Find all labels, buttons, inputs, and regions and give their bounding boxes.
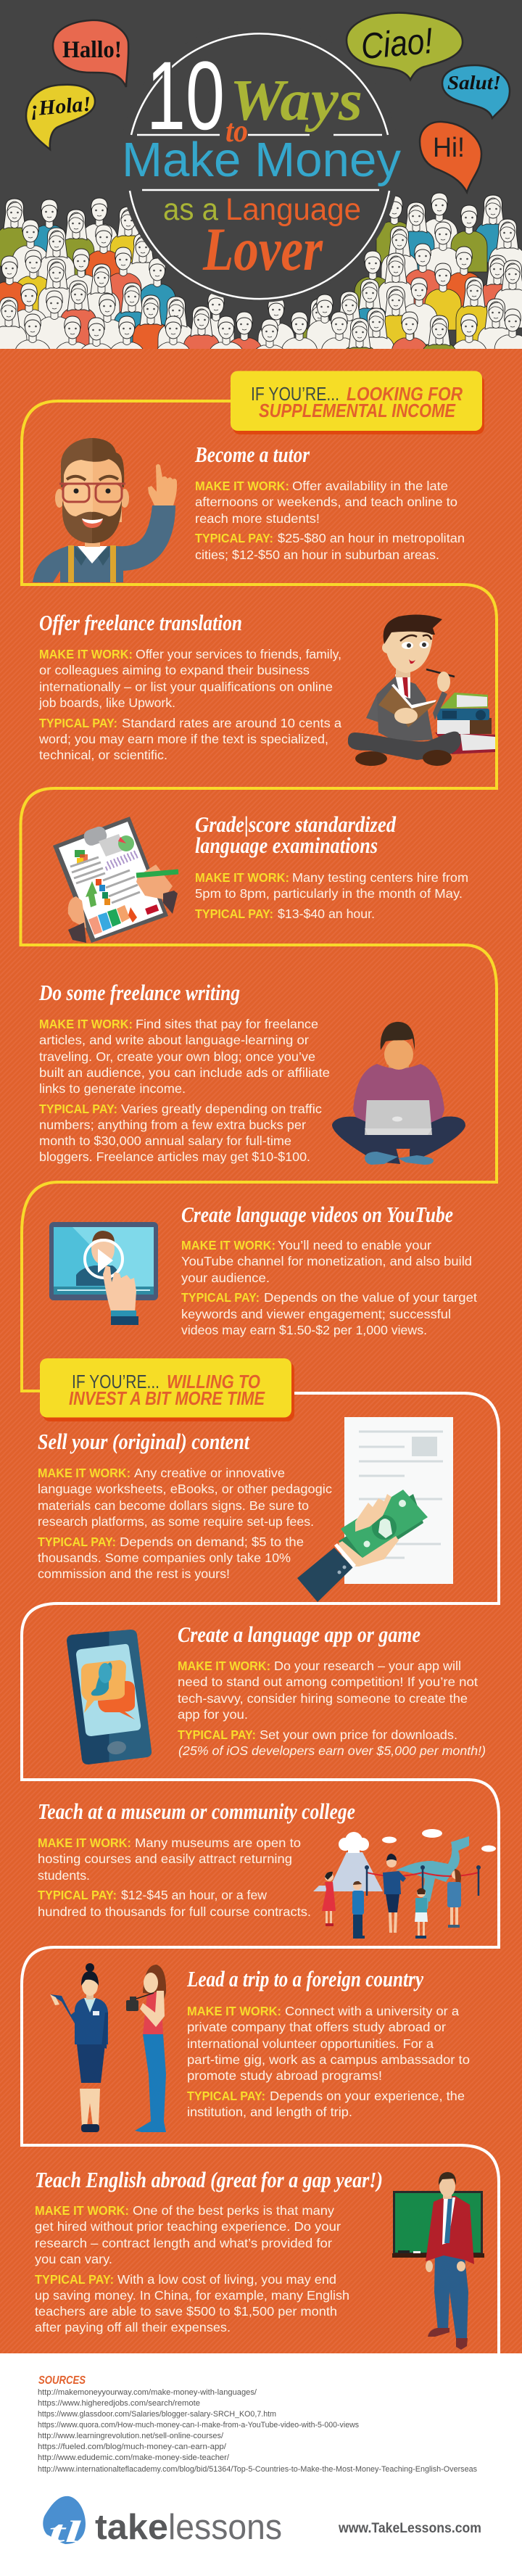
typical pay text: commission and the rest is yours!: [38, 1566, 230, 1581]
sources list: http://www.edudemic.com/make-money-side-teacher/: [38, 2453, 230, 2462]
sources list: [38, 2374, 477, 2474]
figure: tourist: [126, 1965, 166, 2132]
make it work text: part-time gig, work as a campus ambassador to: [187, 2052, 470, 2067]
speech bubble: Hallo: [53, 20, 128, 87]
make it work text: MAKE IT WORK:: [35, 2203, 129, 2218]
yellow connector line: [20, 401, 497, 1391]
typical pay text: numbers; anything from a few extra bucks per: [39, 1118, 306, 1132]
typical pay text: TYPICAL PAY:: [181, 1290, 260, 1305]
icon: person with laptop: [332, 1022, 465, 1165]
typical pay text: TYPICAL PAY:: [35, 2272, 114, 2287]
figure: girl: [415, 1888, 428, 1939]
make it work text: need to stand out among competition! If you’re not: [178, 1675, 478, 1689]
icon: museum scene: [313, 1829, 496, 1939]
callout: looking for supplemental income: SUPPLEMENTAL INCOME: [259, 400, 456, 421]
make it work text: your audience.: [181, 1271, 270, 1285]
speech bubble: Salut: [442, 65, 510, 118]
section: language app: [67, 1622, 486, 1764]
heading: Sell your (original) content: [38, 1429, 250, 1454]
make it work text: Connect with a university or a: [285, 2004, 459, 2018]
logo: takelessons: [43, 2496, 282, 2549]
sources list: https://fueled.com/blog/much-money-can-earn-app/: [38, 2443, 227, 2451]
speech bubble: Ciao: Ciao!: [360, 20, 434, 67]
speech bubble: Salut: Salut!: [447, 72, 501, 94]
make it work text: [38, 647, 341, 710]
typical pay text: institution, and length of trip.: [187, 2105, 352, 2119]
make it work text: built an audience, you can include ads or affiliate: [39, 1065, 330, 1080]
speech bubble: Ciao: [347, 13, 463, 80]
section: become a tutor: [33, 438, 465, 582]
typical pay text: $25-$80 an hour in metropolitan: [278, 531, 465, 545]
typical pay text: TYPICAL PAY:: [38, 1535, 116, 1549]
make it work text: hosting courses and easily attract returning: [38, 1852, 292, 1866]
title: as a Language: Language: [225, 192, 361, 227]
heading: Become a tutor: [194, 442, 310, 467]
make it work text: research – contract length and what’s provided for: [35, 2236, 332, 2250]
make it work text: afternoons or weekends, and teach online to: [195, 495, 457, 509]
typical pay text: TYPICAL PAY:: [178, 1727, 256, 1742]
heading: [195, 812, 396, 858]
speech bubble: Hola: ¡Hola!: [30, 92, 92, 121]
make it work text: MAKE IT WORK:: [39, 647, 133, 661]
callout: willing to invest more time: [40, 1358, 294, 1421]
heading: Grade|score standardized: [195, 812, 396, 837]
logo: takelessons: take: [95, 2508, 168, 2547]
typical pay text: hundred to thousands for full course contracts.: [38, 1904, 311, 1919]
typical pay text: bloggers. Freelance articles may get $10-$100.: [39, 1149, 310, 1164]
make it work text: MAKE IT WORK:: [38, 1466, 130, 1480]
figure: child in red: [322, 1872, 336, 1926]
callout: looking for supplemental income: IF YOU’RE...: [251, 383, 339, 405]
make it work text: [181, 1238, 472, 1285]
header panel: [0, 0, 522, 386]
callout: looking for supplemental income: LOOKING FOR: [347, 383, 463, 405]
speech bubble: Hola: [26, 85, 95, 149]
make it work text: Many testing centers hire from: [292, 870, 468, 885]
typical pay text: cities; $12-$50 an hour in suburban areas.: [195, 548, 439, 562]
make it work text: [178, 1659, 478, 1722]
heading: Create language videos on YouTube: [181, 1202, 453, 1227]
typical pay text: Depends on the value of your target: [264, 1290, 477, 1305]
logo: takelessons: lessons: [168, 2508, 282, 2547]
sources list: SOURCES: [38, 2374, 86, 2387]
make it work text: MAKE IT WORK:: [187, 2004, 281, 2018]
make it work text: One of the best perks is that many: [133, 2203, 334, 2218]
title: Make Money: Make Money: [122, 133, 401, 187]
make it work text: [38, 1836, 301, 1883]
make it work text: app for you.: [178, 1707, 248, 1722]
white connector line: [22, 1393, 499, 2353]
dark title circle: [120, 22, 399, 302]
typical pay text: TYPICAL PAY:: [39, 1102, 117, 1116]
typical pay text: thousands. Some companies only take 10%: [38, 1551, 291, 1565]
icon: phone with chat bubbles: [67, 1630, 152, 1764]
typical pay text: technical, or scientific.: [39, 748, 167, 762]
make it work text: MAKE IT WORK:: [195, 870, 289, 885]
make it work text: language worksheets, eBooks, or other pedagogic: [38, 1482, 332, 1496]
typical pay text: Standard rates are around 10 cents a: [122, 716, 341, 730]
heading: Teach at a museum or community college: [38, 1799, 355, 1824]
typical pay text: Depends on your experience, the: [270, 2089, 465, 2103]
make it work text: research platforms, as some require set-up fees.: [38, 1514, 314, 1529]
make it work text: YouTube channel for monetization, and also build: [181, 1254, 472, 1268]
typical pay text: [38, 1888, 311, 1919]
typical pay text: [39, 1102, 322, 1164]
typical pay text: [178, 1727, 486, 1758]
heading: Teach English abroad (great for a gap year!): [35, 2167, 383, 2192]
typical pay text: TYPICAL PAY:: [195, 907, 273, 921]
make it work text: Many museums are open to: [135, 1836, 301, 1850]
title: as a Language: as a: [163, 192, 218, 227]
section: teach english abroad: [35, 2167, 484, 2350]
sources list: https://www.higheredjobs.com/search/remote: [38, 2399, 200, 2408]
icon: document with money: [297, 1417, 453, 1602]
title: Ways: Ways: [230, 69, 362, 133]
section: museum or community college: [38, 1799, 496, 1939]
make it work text: [38, 1466, 332, 1529]
make it work text: promote study abroad programs!: [187, 2068, 382, 2083]
section: grade standardized exams: [53, 812, 468, 943]
typical pay text: [195, 907, 375, 921]
typical pay text: word; you may earn more if the text is specialized,: [38, 732, 328, 746]
sources list: https://www.glassdoor.com/Salaries/blogger-salary-SRCH_KO0,7.htm: [38, 2410, 276, 2419]
icon: tour guide and tourist: [50, 1963, 166, 2132]
make it work text: MAKE IT WORK:: [38, 1836, 131, 1850]
make it work text: [35, 2203, 341, 2266]
make it work text: students.: [38, 1868, 90, 1883]
make it work text: [187, 2004, 470, 2083]
make it work text: reach more students!: [195, 511, 320, 526]
circle outline: [130, 33, 389, 299]
sources list: https://www.quora.com/How-much-money-can-I-make-from-a-YouTube-video-with-5-000-views: [38, 2421, 359, 2430]
make it work text: Offer your services to friends, family,: [136, 647, 341, 661]
icon: video tablet with hand: [49, 1222, 158, 1325]
speech bubble: Hallo: Hallo!: [62, 37, 122, 63]
make it work text: internationally – or list your qualifications on online: [39, 680, 333, 694]
typical pay text: [38, 1535, 304, 1581]
icon: clipboard with test: [53, 817, 178, 943]
make it work text: MAKE IT WORK:: [195, 479, 289, 493]
callout: looking for supplemental income: [231, 371, 484, 434]
make it work text: materials can become dollars signs. Be sure to: [38, 1498, 309, 1513]
typical pay text: teachers are able to save $500 to $1,500 per month: [35, 2304, 337, 2319]
make it work text: MAKE IT WORK:: [178, 1659, 270, 1673]
speech bubble: Hi: [420, 122, 481, 192]
icon: bearded tutor: [33, 438, 177, 582]
make it work text: Find sites that pay for freelance: [136, 1017, 318, 1031]
typical pay text: [187, 2089, 465, 2119]
typical pay text: $13-$40 an hour.: [278, 907, 375, 921]
make it work text: or colleagues aiming to expand their business: [39, 663, 310, 677]
typical pay text: TYPICAL PAY:: [187, 2089, 265, 2103]
section: freelance translation: [38, 610, 495, 766]
figure: boy in blue: [352, 1881, 365, 1939]
callout: willing to invest more time: INVEST A BIT MORE TIME: [69, 1387, 265, 1409]
make it work text: Do your research – your app will: [274, 1659, 461, 1673]
typical pay text: after paying off all their expenses.: [35, 2320, 231, 2334]
make it work text: MAKE IT WORK:: [181, 1238, 276, 1252]
heading: language examinations: [195, 833, 378, 858]
icon: teacher at chalkboard: [392, 2172, 484, 2350]
typical pay text: videos may earn $1.50-$2 per 1,000 views.: [181, 1323, 427, 1337]
heading: Offer freelance translation: [39, 610, 242, 635]
title: Lover: Lover: [202, 215, 323, 284]
typical pay text: [195, 531, 465, 562]
make it work text: job boards, like Upwork.: [38, 695, 175, 710]
make it work text: international volunteer opportunities. For a: [187, 2036, 434, 2051]
make it work text: MAKE IT WORK:: [39, 1017, 133, 1031]
sources list: http://www.learningrevolution.net/sell-online-courses/: [38, 2432, 224, 2440]
make it work text: Any creative or innovative: [134, 1466, 285, 1480]
typical pay text: keywords and viewer engagement; successful: [181, 1307, 451, 1321]
callout: willing to invest more time: IF YOU’RE...: [72, 1371, 160, 1392]
typical pay text: up saving money. In China, for example, many English: [35, 2288, 349, 2303]
make it work text: articles, and write about language-learning or: [39, 1033, 309, 1047]
make it work text: traveling. Or, create your own blog; once you’ve: [39, 1049, 315, 1064]
website url: www.TakeLessons.com: [338, 2521, 481, 2536]
typical pay text: (25% of iOS developers earn over $5,000 per month!): [178, 1743, 486, 1758]
make it work text: [195, 479, 457, 526]
icon: translator with books: [348, 614, 495, 766]
section: freelance writing: [38, 980, 465, 1165]
make it work text: [195, 870, 468, 901]
figure: museum guide: [383, 1854, 406, 1933]
typical pay text: With a low cost of living, you may end: [117, 2272, 336, 2287]
speech bubble: Hi: Hi!: [433, 133, 465, 163]
make it work text: links to generate income.: [39, 1081, 186, 1096]
section: youtube videos: [49, 1202, 477, 1337]
typical pay text: Depends on demand; $5 to the: [120, 1535, 304, 1549]
make it work text: get hired without prior teaching experience. Do your: [35, 2219, 341, 2234]
make it work text: 5pm to 8pm, particularly in the month of May.: [195, 886, 463, 901]
typical pay text: [181, 1290, 477, 1337]
make it work text: private company that offers study abroad or: [187, 2020, 446, 2034]
title: 10: 10: [146, 42, 225, 150]
typical pay text: TYPICAL PAY:: [38, 1888, 117, 1902]
orange background panel: [0, 349, 522, 903]
sources list: http://www.internationalteflacademy.com/blog/bid/51364/Top-5-Countries-to-Make-the-Most-Money-Teaching-English-Overseas: [38, 2465, 477, 2474]
typical pay text: [38, 716, 341, 762]
make it work text: you can vary.: [35, 2252, 112, 2266]
sources list: http://makemoneyyourway.com/make-money-with-languages/: [38, 2388, 257, 2397]
callout: willing to invest more time: WILLING TO: [167, 1371, 260, 1392]
title: to: to: [225, 113, 248, 149]
figure: woman: [447, 1869, 461, 1928]
typical pay text: TYPICAL PAY:: [195, 531, 273, 545]
heading: Do some freelance writing: [38, 980, 240, 1005]
typical pay text: $12-$45 an hour, or a few: [121, 1888, 267, 1902]
make it work text: tech-savvy, consider hiring someone to create the: [178, 1691, 468, 1706]
section: lead a trip: [50, 1963, 470, 2132]
heading: Create a language app or game: [178, 1622, 420, 1647]
section: sell your content: [38, 1417, 453, 1602]
make it work text: [39, 1017, 330, 1096]
crowd illustration: [0, 193, 522, 386]
typical pay text: Set your own price for downloads.: [260, 1727, 457, 1742]
logo: takelessons: tl: [49, 2516, 82, 2549]
make it work text: You’ll need to enable your: [278, 1238, 431, 1252]
typical pay text: Varies greatly depending on traffic: [121, 1102, 322, 1116]
typical pay text: [35, 2272, 349, 2334]
title: as a Language: [163, 192, 361, 227]
typical pay text: month to $30,000 annual salary for full-time: [39, 1134, 291, 1148]
make it work text: Offer availability in the late: [292, 479, 448, 493]
typical pay text: TYPICAL PAY:: [39, 716, 117, 730]
orange background panel lower: [0, 903, 522, 2353]
heading: Lead a trip to a foreign country: [186, 1966, 423, 1991]
figure: tour guide: [50, 1963, 108, 2132]
